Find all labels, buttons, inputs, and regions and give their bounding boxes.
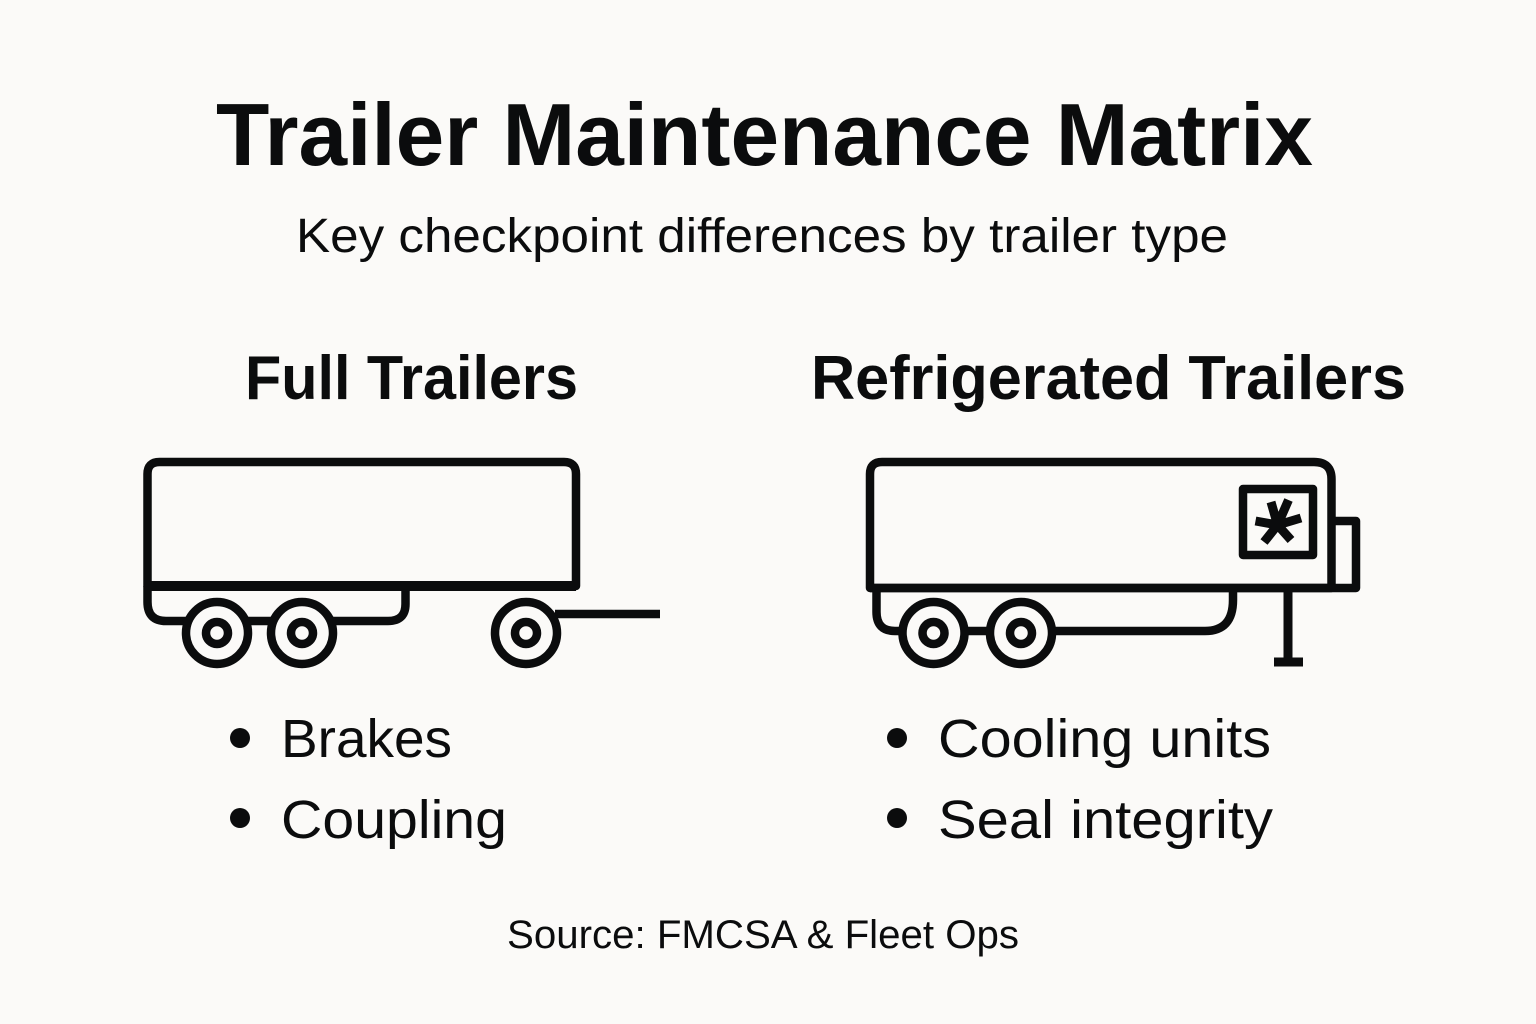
list: full trailer checkpoints: Brakes [281, 709, 452, 769]
list: full trailer checkpoints [230, 709, 507, 850]
panel: refrigerated trailers [811, 344, 1406, 850]
list: refrigerated trailer checkpoints: Seal integrity [938, 790, 1273, 850]
icon: full trailer [147, 462, 660, 664]
heading: refrigerated trailers: Refrigerated Trailers [811, 344, 1406, 413]
list: full trailer checkpoints: Coupling [281, 790, 507, 850]
icon: refrigerated trailer [870, 462, 1356, 664]
subtitle: Key checkpoint differences by trailer type [296, 210, 1228, 263]
panel: full trailers [147, 344, 660, 850]
list: refrigerated trailer checkpoints: Cooling units [938, 709, 1271, 769]
list: refrigerated trailer checkpoints [887, 709, 1273, 850]
heading: full trailers: Full Trailers [245, 344, 578, 413]
source note: Source: FMCSA & Fleet Ops [507, 913, 1019, 957]
title: Trailer Maintenance Matrix [216, 85, 1313, 184]
